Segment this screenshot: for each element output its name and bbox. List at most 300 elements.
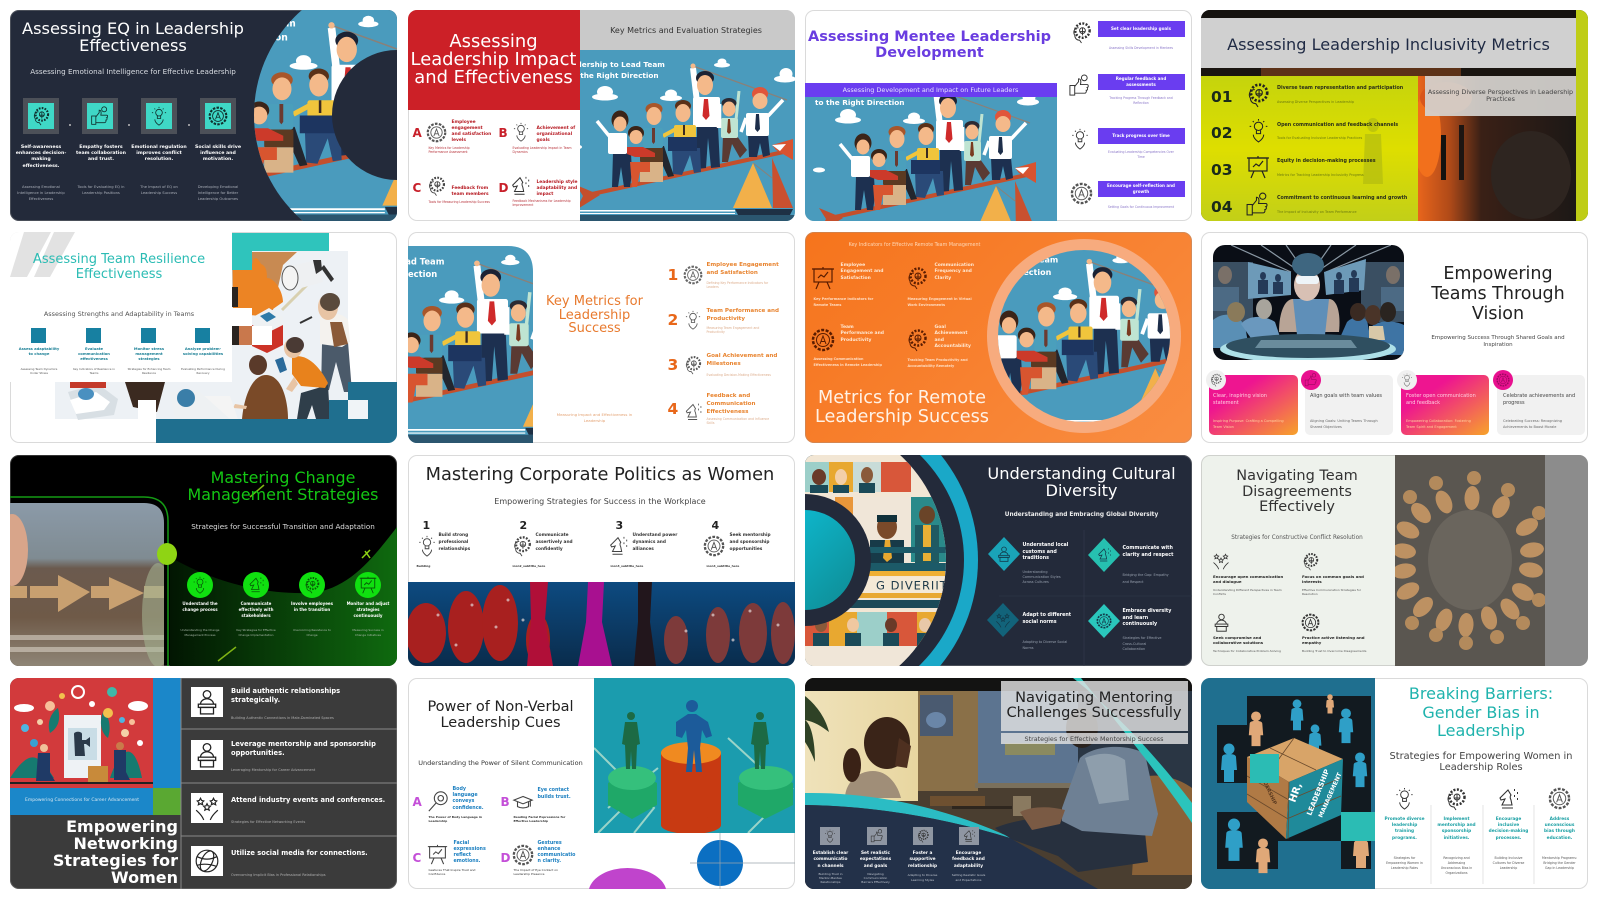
- note 4: Gap in Leadership: [1545, 866, 1574, 870]
- image: leadership cube and figures: LEADERSHIP: [1257, 771, 1278, 806]
- strategy 2: [536, 532, 573, 553]
- number 03: 03: [1211, 161, 1233, 179]
- card 3 note: [1406, 418, 1471, 430]
- note 1: Remote Teams: [814, 302, 841, 306]
- background: fire image: [1201, 10, 1588, 221]
- item D note: [512, 199, 571, 207]
- note A: Leadership: [428, 819, 447, 823]
- icon: gear brain: [510, 535, 532, 557]
- cue B: [538, 788, 571, 801]
- action 3: [1483, 817, 1534, 842]
- note 2: [69, 367, 119, 375]
- title: Strategies for: [53, 850, 178, 870]
- card 4 text: progress: [1503, 400, 1525, 406]
- metric 3: Performance and: [840, 331, 884, 336]
- icon: knight: [512, 176, 530, 195]
- note 1: Management Process: [185, 632, 215, 636]
- note 1: Conflicts: [1213, 592, 1226, 596]
- number 04: 04: [1211, 198, 1233, 216]
- point 4: influence and: [200, 151, 236, 156]
- note 4: Intelligence for Better: [198, 191, 238, 195]
- subtitle band text: Assessing Development and Impact on Future Leaders: [843, 86, 1018, 94]
- image: leadership cube and figures: LEADERSHIP: [1305, 768, 1331, 817]
- note 1: Strategies for: [1394, 856, 1415, 860]
- note 4: [198, 185, 238, 201]
- title: [22, 19, 244, 54]
- icon: team: [1212, 552, 1230, 570]
- strategy 4: [1302, 634, 1365, 645]
- action 4: bias through: [1544, 829, 1575, 834]
- note 2: Teams: [90, 371, 98, 375]
- action 2: Implement: [1443, 817, 1470, 822]
- illustration: cultural mosaic and arcs: [805, 455, 1192, 666]
- icon: gears: [1301, 613, 1320, 632]
- icon: knight: [1496, 787, 1520, 811]
- strategy 3: [1213, 634, 1263, 645]
- panel: Assessing Mentee Leadership Development: [804, 10, 1192, 221]
- strategy 4: Seek mentorship: [730, 533, 771, 538]
- icon tile 2: [866, 827, 886, 845]
- strategy 1: [438, 532, 470, 553]
- letter B: B: [498, 126, 508, 140]
- note 4: Bridging the Gender: [1543, 861, 1576, 865]
- action 4: [1534, 817, 1585, 842]
- icon: thumb: [1069, 74, 1089, 96]
- icon box: globe: [191, 846, 223, 876]
- illustration: team on arrow in circle: [254, 10, 397, 221]
- image: blurred red and magenta figures: [408, 455, 794, 666]
- point 2: communication: [78, 352, 110, 356]
- note 1: Key Performance Indicators for: [814, 297, 873, 301]
- step 4: feedback and: [952, 857, 985, 862]
- metric 4: and: [934, 338, 944, 343]
- title: Assessing Leadership Inclusivity Metrics: [1227, 35, 1550, 54]
- strategy 3: collaborative solutions: [1213, 640, 1263, 645]
- subtitle: [532, 412, 656, 424]
- subtitle: [1375, 751, 1587, 773]
- item 2: Open communication and feedback channels: [1277, 123, 1398, 128]
- panel: Mastering Corporate Politics as Women: [408, 455, 794, 666]
- note 1: [173, 628, 227, 637]
- note 1: Assessing Skills Development in Mentees: [1109, 46, 1173, 50]
- note 4: Change Initiatives: [355, 632, 381, 636]
- panel: Breaking Barriers: Gender Bias in Leadership: [1201, 678, 1588, 889]
- note 2: Organizations: [1445, 871, 1468, 875]
- letter C: C: [412, 851, 421, 865]
- icon tile 4: [195, 328, 210, 343]
- note 4: [1534, 856, 1585, 871]
- title: Empowering: [1443, 264, 1553, 284]
- point 2: Empathy fosters: [79, 145, 123, 150]
- side box text: Practices: [1486, 95, 1515, 103]
- note 3: Norms: [1022, 646, 1034, 650]
- illustration: team on arrow in circle: Leadership to Lead Team: [165, 19, 296, 30]
- button 3: [1098, 128, 1184, 144]
- note 2: Key Strategies for Effective: [236, 628, 276, 632]
- point 3: Monitor stress: [134, 346, 164, 350]
- card 3 text: and feedback: [1406, 400, 1440, 406]
- icon tile 2: [86, 328, 101, 343]
- item C text: team members: [452, 192, 489, 197]
- icon: knight: [606, 535, 628, 557]
- title: Breaking Barriers:: [1409, 684, 1553, 703]
- subtitle: Strategies for Successful Transition and Adaptation: [191, 522, 375, 531]
- action 2: initiatives.: [1444, 836, 1469, 841]
- point 3: social norms: [1022, 620, 1057, 625]
- note 4: [178, 367, 228, 375]
- point 2: clarity and respect: [1122, 553, 1173, 558]
- strategy 1: Build authentic relationships: [231, 687, 340, 695]
- note 1: [814, 297, 873, 308]
- step 1: [806, 851, 856, 870]
- note 3: Cultures for Diverse: [1493, 861, 1524, 865]
- note 3: [814, 357, 882, 368]
- icon: gear loop: [810, 328, 834, 352]
- button 4: [1098, 181, 1184, 197]
- caption 4: icon4_subtitle_here: [706, 564, 739, 568]
- point 2: [76, 144, 126, 162]
- action 4: education.: [1547, 836, 1572, 841]
- illustration: team on arrow in ring: Leadership to Lead Team: [945, 256, 1058, 265]
- action 1: [1379, 817, 1430, 842]
- step 1: Understand the: [182, 601, 218, 606]
- title: Management Strategies: [188, 485, 378, 504]
- item D note: Feedback Mechanisms for Leadership: [512, 199, 571, 203]
- note 2: Recognizing and: [1443, 856, 1470, 860]
- number 3: 3: [668, 356, 678, 374]
- item A text: levels: [452, 138, 466, 143]
- strategy 4: opportunities: [730, 547, 762, 552]
- cue C: emotions.: [454, 859, 480, 864]
- step 1: Establish clear: [813, 851, 848, 856]
- note 2: [78, 185, 124, 195]
- panel: Mastering Change Management Strategies: [10, 455, 397, 666]
- note 2: Tools for Evaluating EQ in: [78, 185, 124, 189]
- step 1: communicatio: [814, 857, 847, 862]
- card 4 text: Celebrate achievements and: [1503, 393, 1575, 399]
- step 2: Set realistic: [861, 851, 890, 856]
- note 4: Measuring Success in: [352, 628, 384, 632]
- step 4: continuously: [354, 613, 382, 618]
- item C text: [452, 186, 489, 197]
- cue A: language: [452, 793, 478, 798]
- title: Assessing Team Resilience: [33, 252, 205, 267]
- metric 1: Employee Engagement: [706, 262, 779, 268]
- note 1: [1022, 570, 1061, 586]
- metric 4: Effectiveness: [706, 409, 748, 415]
- icon: bulb: [1250, 119, 1268, 142]
- title: [804, 389, 1000, 426]
- strategy 2: Communicate: [536, 533, 569, 538]
- card 1 text: Clear, inspiring vision: [1213, 393, 1267, 399]
- note 1: [806, 872, 856, 884]
- cue D: enhance: [538, 847, 560, 852]
- note B: Effective Leadership: [514, 819, 548, 823]
- illustration: team on arrow in rounded frame: [408, 246, 533, 443]
- letter A: A: [412, 795, 422, 809]
- illustration: team on arrow in circle: in the Right Direction: [175, 33, 288, 44]
- title box: [1000, 681, 1188, 731]
- subtitle box: [1000, 733, 1188, 744]
- title: Navigating Mentoring: [1015, 689, 1173, 706]
- subtitle: Assessing Strengths and Adaptability in Teams: [44, 310, 194, 318]
- step 4: Encourage: [956, 851, 981, 856]
- panel: Assessing Leadership Inclusivity Metrics: [1201, 10, 1588, 221]
- number 3: 3: [616, 519, 623, 532]
- note 1: Understanding: [1022, 570, 1047, 574]
- item C text: Feedback from: [452, 186, 488, 191]
- title: Leadership Impact: [411, 49, 576, 70]
- illustration: team on arrow: in the Right Direction: [570, 71, 658, 80]
- icon: bulb: [514, 122, 528, 142]
- button 4 text: Encourage self-reflection and: [1107, 183, 1175, 188]
- icon: gear brain: [1073, 22, 1091, 44]
- strategy 2: Focus on common goals and: [1302, 574, 1364, 578]
- note D: The Impact of Eye Contact on: [514, 868, 558, 872]
- note 4: Recovery: [197, 371, 209, 375]
- note 1: Relationships: [820, 880, 840, 884]
- button 4 text: growth: [1133, 189, 1149, 194]
- item B text: Achievement of: [536, 126, 575, 131]
- strategy 2: Leverage mentorship and sponsorship: [231, 740, 376, 748]
- point 4: Embrace diversity: [1122, 609, 1171, 614]
- illustration: team on arrow: Leadership to Lead Team: [562, 60, 665, 69]
- card 1 note: Team Vision: [1213, 424, 1234, 428]
- item C note: Tools for Measuring Leadership Success: [428, 200, 490, 204]
- metric 4: Accountability: [934, 344, 971, 349]
- subtitle: Inspiration: [1483, 342, 1513, 348]
- action 3: Encourage: [1496, 817, 1521, 822]
- icon: gear A: [1548, 787, 1571, 810]
- subtitle: Empowering Strategies for Success in the Workplace: [494, 497, 706, 506]
- icon box: hands and stars: [191, 793, 223, 823]
- illustration: team on arrow: [805, 83, 1057, 221]
- button 3 text: Track progress over time: [1112, 133, 1170, 138]
- cue A: Body: [452, 787, 466, 792]
- note 2: Leveraging Mentorship for Career Advancement: [231, 768, 315, 772]
- point 1: customs and: [1022, 550, 1057, 555]
- action 3: processes.: [1496, 836, 1521, 841]
- metric 1: Engagement and: [840, 269, 883, 274]
- note 2: Measuring Engagement in Virtual: [908, 297, 972, 301]
- metric 4: Feedback and: [706, 393, 750, 399]
- step 3: Foster a: [913, 851, 932, 856]
- button 1: [1098, 21, 1184, 37]
- title: [1375, 685, 1587, 740]
- item A text: engagement: [452, 126, 483, 131]
- subtitle: Understanding and Embracing Global Diversity: [1005, 512, 1158, 518]
- note D: Leadership Presence: [514, 872, 545, 876]
- metric 3: [840, 325, 884, 344]
- metric 2: Frequency and: [934, 269, 972, 274]
- image: leadership cube and figures: MANAGEMENT: [1317, 771, 1344, 819]
- title: [972, 466, 1190, 499]
- number 01: 01: [1211, 88, 1233, 106]
- icon: thumb: [1246, 192, 1268, 216]
- point 2: [78, 346, 110, 360]
- note 1: Empowering Women in: [1386, 861, 1423, 865]
- point 2: [1122, 546, 1173, 559]
- title: Diversity: [1045, 480, 1118, 500]
- strategy 2: assertively and: [536, 540, 573, 545]
- title: [808, 29, 1051, 61]
- icon: graduation cap: [512, 791, 534, 813]
- note 2: Reflection: [1133, 101, 1149, 105]
- note 1: Building Trust in: [818, 872, 843, 876]
- icon: bulb: [1393, 787, 1416, 810]
- item D note: Improvement: [512, 203, 533, 207]
- metric 2: [934, 263, 974, 282]
- number 02: 02: [1211, 124, 1233, 142]
- note 2: [1302, 588, 1361, 597]
- item 1: Diverse team representation and participation: [1277, 86, 1403, 91]
- note 4: The Impact of Inclusivity on Team Performance: [1277, 210, 1357, 214]
- card 4 note: Celebrating Success: Recognizing: [1503, 418, 1562, 422]
- icon: chalkboard: [426, 844, 448, 865]
- item A text: and satisfaction: [452, 132, 491, 137]
- icon: knight: [682, 402, 702, 422]
- step 2: Communicate: [241, 601, 271, 606]
- note A: [428, 816, 482, 824]
- note 4: Tracking Team Productivity and: [908, 358, 968, 362]
- step 4: strategies: [357, 607, 379, 612]
- item B text: [536, 126, 576, 143]
- note 3: Assessing Communication: [814, 357, 863, 361]
- metric 3: Productivity: [840, 338, 871, 343]
- note 1: [17, 185, 65, 201]
- step 4: Monitor and adjust: [347, 601, 389, 606]
- note 1: Leadership Roles: [1391, 866, 1418, 870]
- step 2: and goals: [864, 864, 887, 869]
- note 3: Strategies for Effective Networking Events: [231, 820, 305, 824]
- subtitle: [1406, 335, 1590, 349]
- metric 4: Achievement: [934, 331, 968, 336]
- note 3: Learning Styles: [911, 878, 934, 882]
- title: [408, 700, 594, 731]
- caption 3: icon3_subtitle_here: [610, 564, 643, 568]
- strategy 1: and dialogue: [1213, 579, 1241, 584]
- side box text: Assessing Diverse Perspectives in Leadership: [1428, 88, 1573, 96]
- note 3: Evaluating Leadership Competencies Over: [1108, 150, 1174, 154]
- note 3: Strategies for Enhancing Team: [128, 367, 170, 371]
- metric 2: Communication: [934, 263, 974, 268]
- note 2: [229, 628, 283, 637]
- step 2: expectations: [860, 857, 891, 862]
- image: leadership cube and figures: HR,: [1287, 781, 1305, 804]
- note 3: [898, 873, 948, 884]
- step 2: effectively with: [239, 607, 273, 612]
- point 4: motivation.: [203, 157, 233, 162]
- card 1 text: [1213, 393, 1267, 407]
- panel: Metrics for Remote Leadership Success: [804, 232, 1192, 443]
- note 2: Bridging the Gap: Empathy: [1122, 573, 1169, 577]
- step 3: Involve employees: [291, 601, 333, 606]
- background: green wave and wooden arrows photo: [10, 484, 397, 666]
- icon tile 1: [31, 328, 46, 343]
- step 3: supportive: [909, 857, 936, 862]
- item D text: [536, 180, 578, 197]
- card 2 note: Aligning Goals: Uniting Teams Through: [1310, 418, 1378, 422]
- item B text: goals: [536, 138, 550, 143]
- icon tile 3: [912, 827, 932, 845]
- step 1: [173, 601, 227, 613]
- button 2: [1098, 74, 1184, 90]
- subtitle: Leadership: [584, 418, 605, 423]
- step 2: stakeholders: [241, 613, 271, 618]
- step 2: [229, 601, 283, 619]
- note 2: Unconscious Bias in: [1441, 866, 1472, 870]
- point 3: [124, 346, 174, 362]
- note 2: [1431, 856, 1482, 877]
- note 1: Across Cultures: [1022, 580, 1049, 584]
- note 3: Overcoming Resistance to: [293, 628, 331, 632]
- title: Metrics for Remote: [818, 388, 986, 408]
- step 3: [898, 851, 948, 870]
- cue B: Eye contact: [538, 788, 569, 793]
- note 3: Techniques for Collaborative Problem-Solving: [1213, 649, 1281, 653]
- note C: Confidence: [428, 872, 445, 876]
- note 4: Skills: [706, 421, 714, 425]
- panel: Assessing Leadership Impact and Effectiveness: [408, 10, 794, 221]
- icon: gear brain: [429, 176, 445, 196]
- note D: [514, 869, 558, 877]
- illustration: team on arrow in ring: in the Right Direction: [953, 268, 1051, 277]
- strategy 3: dynamics and: [632, 540, 666, 545]
- title: Assessing Mentee Leadership: [808, 29, 1051, 45]
- strategy 2: [231, 740, 376, 758]
- panel: Assessing Team Resilience Effectiveness: [10, 232, 397, 443]
- title: Leadership Success: [815, 406, 989, 426]
- side box text: [1428, 88, 1573, 103]
- icon: gear brain: [682, 355, 702, 375]
- title: Effectiveness: [76, 267, 162, 282]
- item B note: Evaluating Leadership Impact in Team: [512, 146, 572, 150]
- step 4: [341, 601, 395, 619]
- action 1: programs.: [1392, 836, 1417, 841]
- note 1: Intelligence in Leadership: [17, 191, 65, 195]
- card 2 note: [1310, 418, 1378, 430]
- metric 1: [840, 263, 883, 282]
- subtitle: Strategies for Empowering Women in: [1390, 751, 1572, 762]
- point 3: improves conflict: [136, 151, 182, 156]
- point 2: team collaboration: [76, 151, 126, 156]
- card 3 text: [1406, 393, 1476, 407]
- metric 1: Employee: [840, 263, 865, 268]
- button 2 text: [1116, 76, 1166, 87]
- title: Challenges Successfully: [1006, 704, 1182, 721]
- note C: [428, 869, 475, 877]
- metric 4: [934, 325, 971, 350]
- illustration: team on arrow: to the Right Direction: [814, 98, 904, 107]
- icon: gear brain: [1248, 83, 1269, 108]
- title: Vision: [1472, 304, 1524, 324]
- title: Empowering: [66, 816, 178, 836]
- note 1: Communication Styles: [1022, 575, 1061, 579]
- action 2: sponsorship: [1442, 829, 1471, 834]
- note 2: Measuring Team Engagement and: [706, 326, 759, 330]
- note 1: [1379, 856, 1430, 871]
- metric 2: Productivity: [706, 316, 745, 322]
- point 2: Evaluate: [85, 346, 103, 350]
- point 3: Emotional regulation: [131, 145, 187, 150]
- point 4: [1122, 609, 1171, 629]
- note 2: [908, 297, 972, 308]
- point 1: effectiveness.: [23, 164, 59, 169]
- point 2: effectiveness: [80, 356, 108, 360]
- title: Understanding Cultural: [987, 464, 1176, 483]
- note 4: Setting Realistic Goals: [952, 873, 985, 877]
- icon box: podium: [191, 687, 223, 717]
